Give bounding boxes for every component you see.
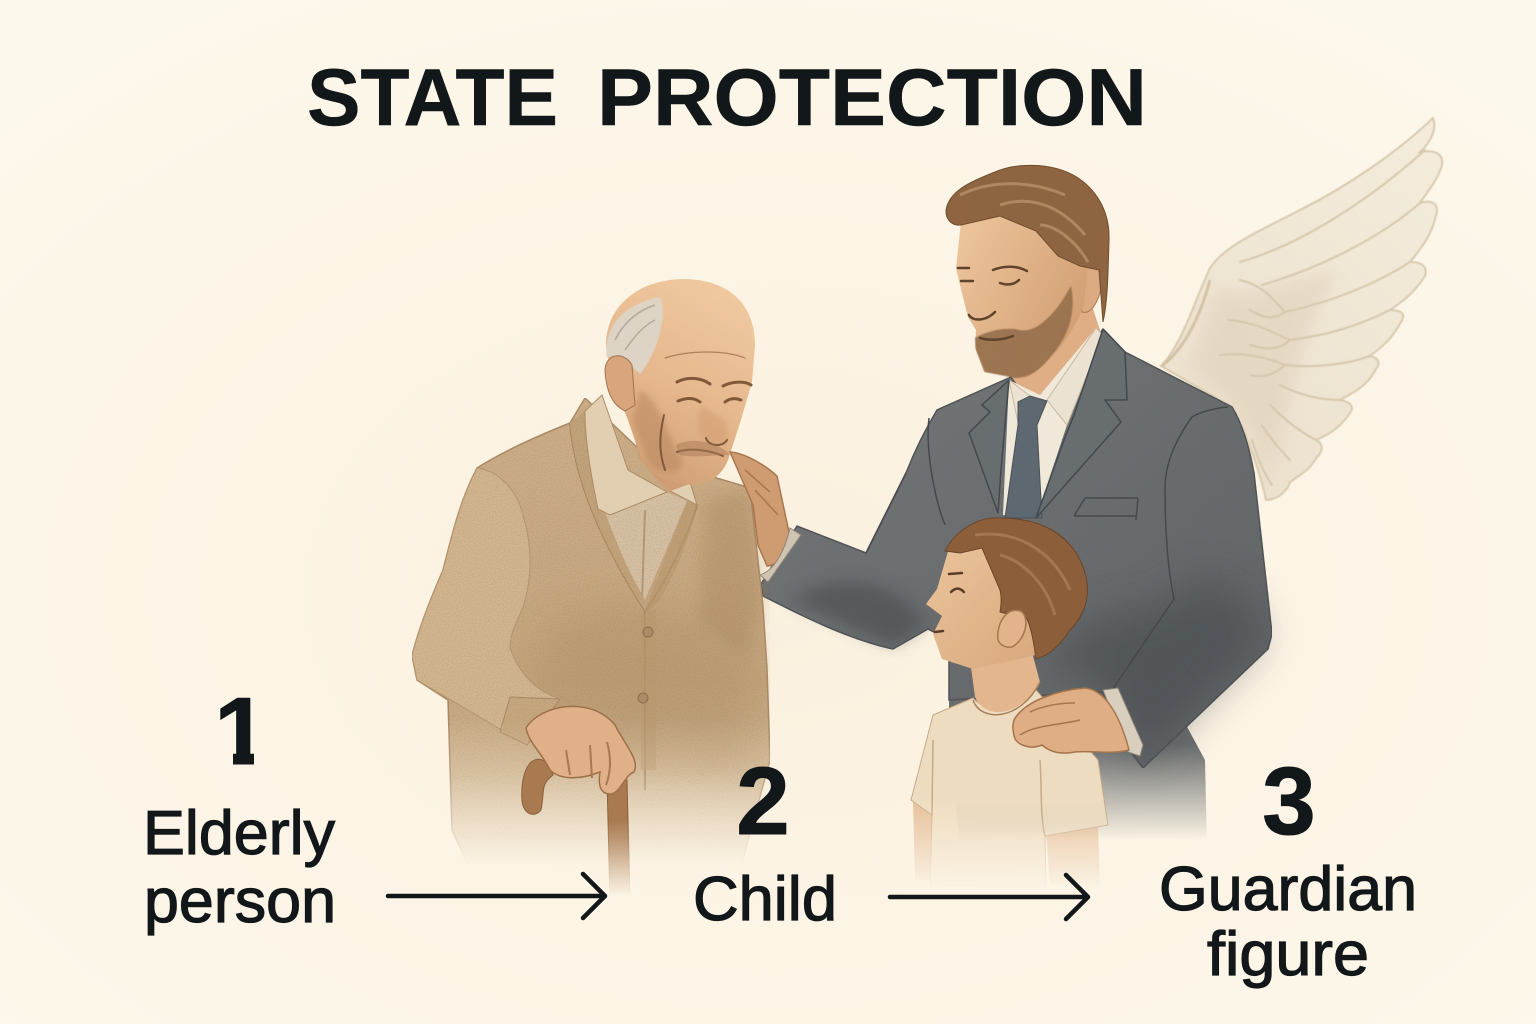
guardian jacket <box>761 329 1272 768</box>
title: PROTECTION <box>597 53 1147 143</box>
guardian right cuff <box>1103 688 1143 756</box>
child face <box>926 540 1045 669</box>
guardian figure <box>761 165 1272 850</box>
wing feather lines <box>1220 150 1425 485</box>
step 2: child <box>693 748 837 934</box>
label: Child <box>693 865 837 934</box>
guardian tie <box>1005 396 1047 518</box>
elderly collar <box>585 395 697 515</box>
cardigan cuff <box>500 697 560 745</box>
elderly ear <box>605 356 635 411</box>
cane <box>522 759 630 900</box>
step 3: guardian figure: figure <box>1207 920 1369 989</box>
child eye and mouth <box>935 573 964 632</box>
cardigan <box>412 398 770 870</box>
guardian hand on child shoulder <box>1013 688 1143 756</box>
guardian hand on elderly shoulder <box>730 452 801 582</box>
elderly head <box>606 279 755 485</box>
child hair <box>945 518 1087 659</box>
number 2: 2 <box>736 748 790 855</box>
number 3: 3 <box>1262 748 1316 855</box>
elderly features <box>660 352 751 470</box>
elderly nose shading <box>698 405 728 446</box>
buttons <box>638 627 653 703</box>
elderly cheek shading <box>632 390 683 472</box>
number 1: 1 <box>214 678 268 785</box>
jacket pocket and seams <box>866 407 1228 690</box>
step 1: elderly person <box>143 678 336 936</box>
arrow 2 <box>890 875 1088 919</box>
elderly hand on cane <box>522 706 635 900</box>
guardian hair <box>946 165 1109 322</box>
elderly body <box>412 398 770 870</box>
guardian jacket shading <box>790 579 1262 765</box>
guardian lapels <box>969 329 1127 518</box>
label: Guardian <box>1159 855 1417 924</box>
guardian left cuff <box>760 528 801 582</box>
cardigan shading <box>530 604 755 780</box>
title: STATE <box>307 53 558 143</box>
elderly person <box>412 279 770 900</box>
guardian torso lower shadow <box>949 692 1206 834</box>
guardian ear <box>1081 256 1103 312</box>
guardian face <box>956 200 1090 378</box>
elderly white hair <box>606 297 663 374</box>
child <box>911 518 1108 890</box>
guardian neck <box>1000 300 1100 410</box>
child ear <box>998 610 1026 647</box>
cardigan sleeve <box>412 468 560 745</box>
shirt <box>606 492 687 609</box>
title <box>307 53 1147 143</box>
guardian shirt <box>1003 328 1103 518</box>
cardigan placket <box>570 423 697 790</box>
hand <box>526 706 635 794</box>
step 1: elderly person: person <box>144 867 336 936</box>
arrow 1 <box>388 874 605 918</box>
guardian beard <box>975 286 1073 378</box>
icon: angel wing <box>1161 118 1442 500</box>
guardian eye and mouth <box>958 267 1027 340</box>
child t-shirt and arms <box>911 690 1108 890</box>
child neck <box>970 645 1040 712</box>
step 3: guardian figure <box>1159 748 1417 989</box>
wing shading <box>1190 270 1340 480</box>
elderly neck <box>625 400 700 492</box>
label: Elderly <box>143 799 335 868</box>
